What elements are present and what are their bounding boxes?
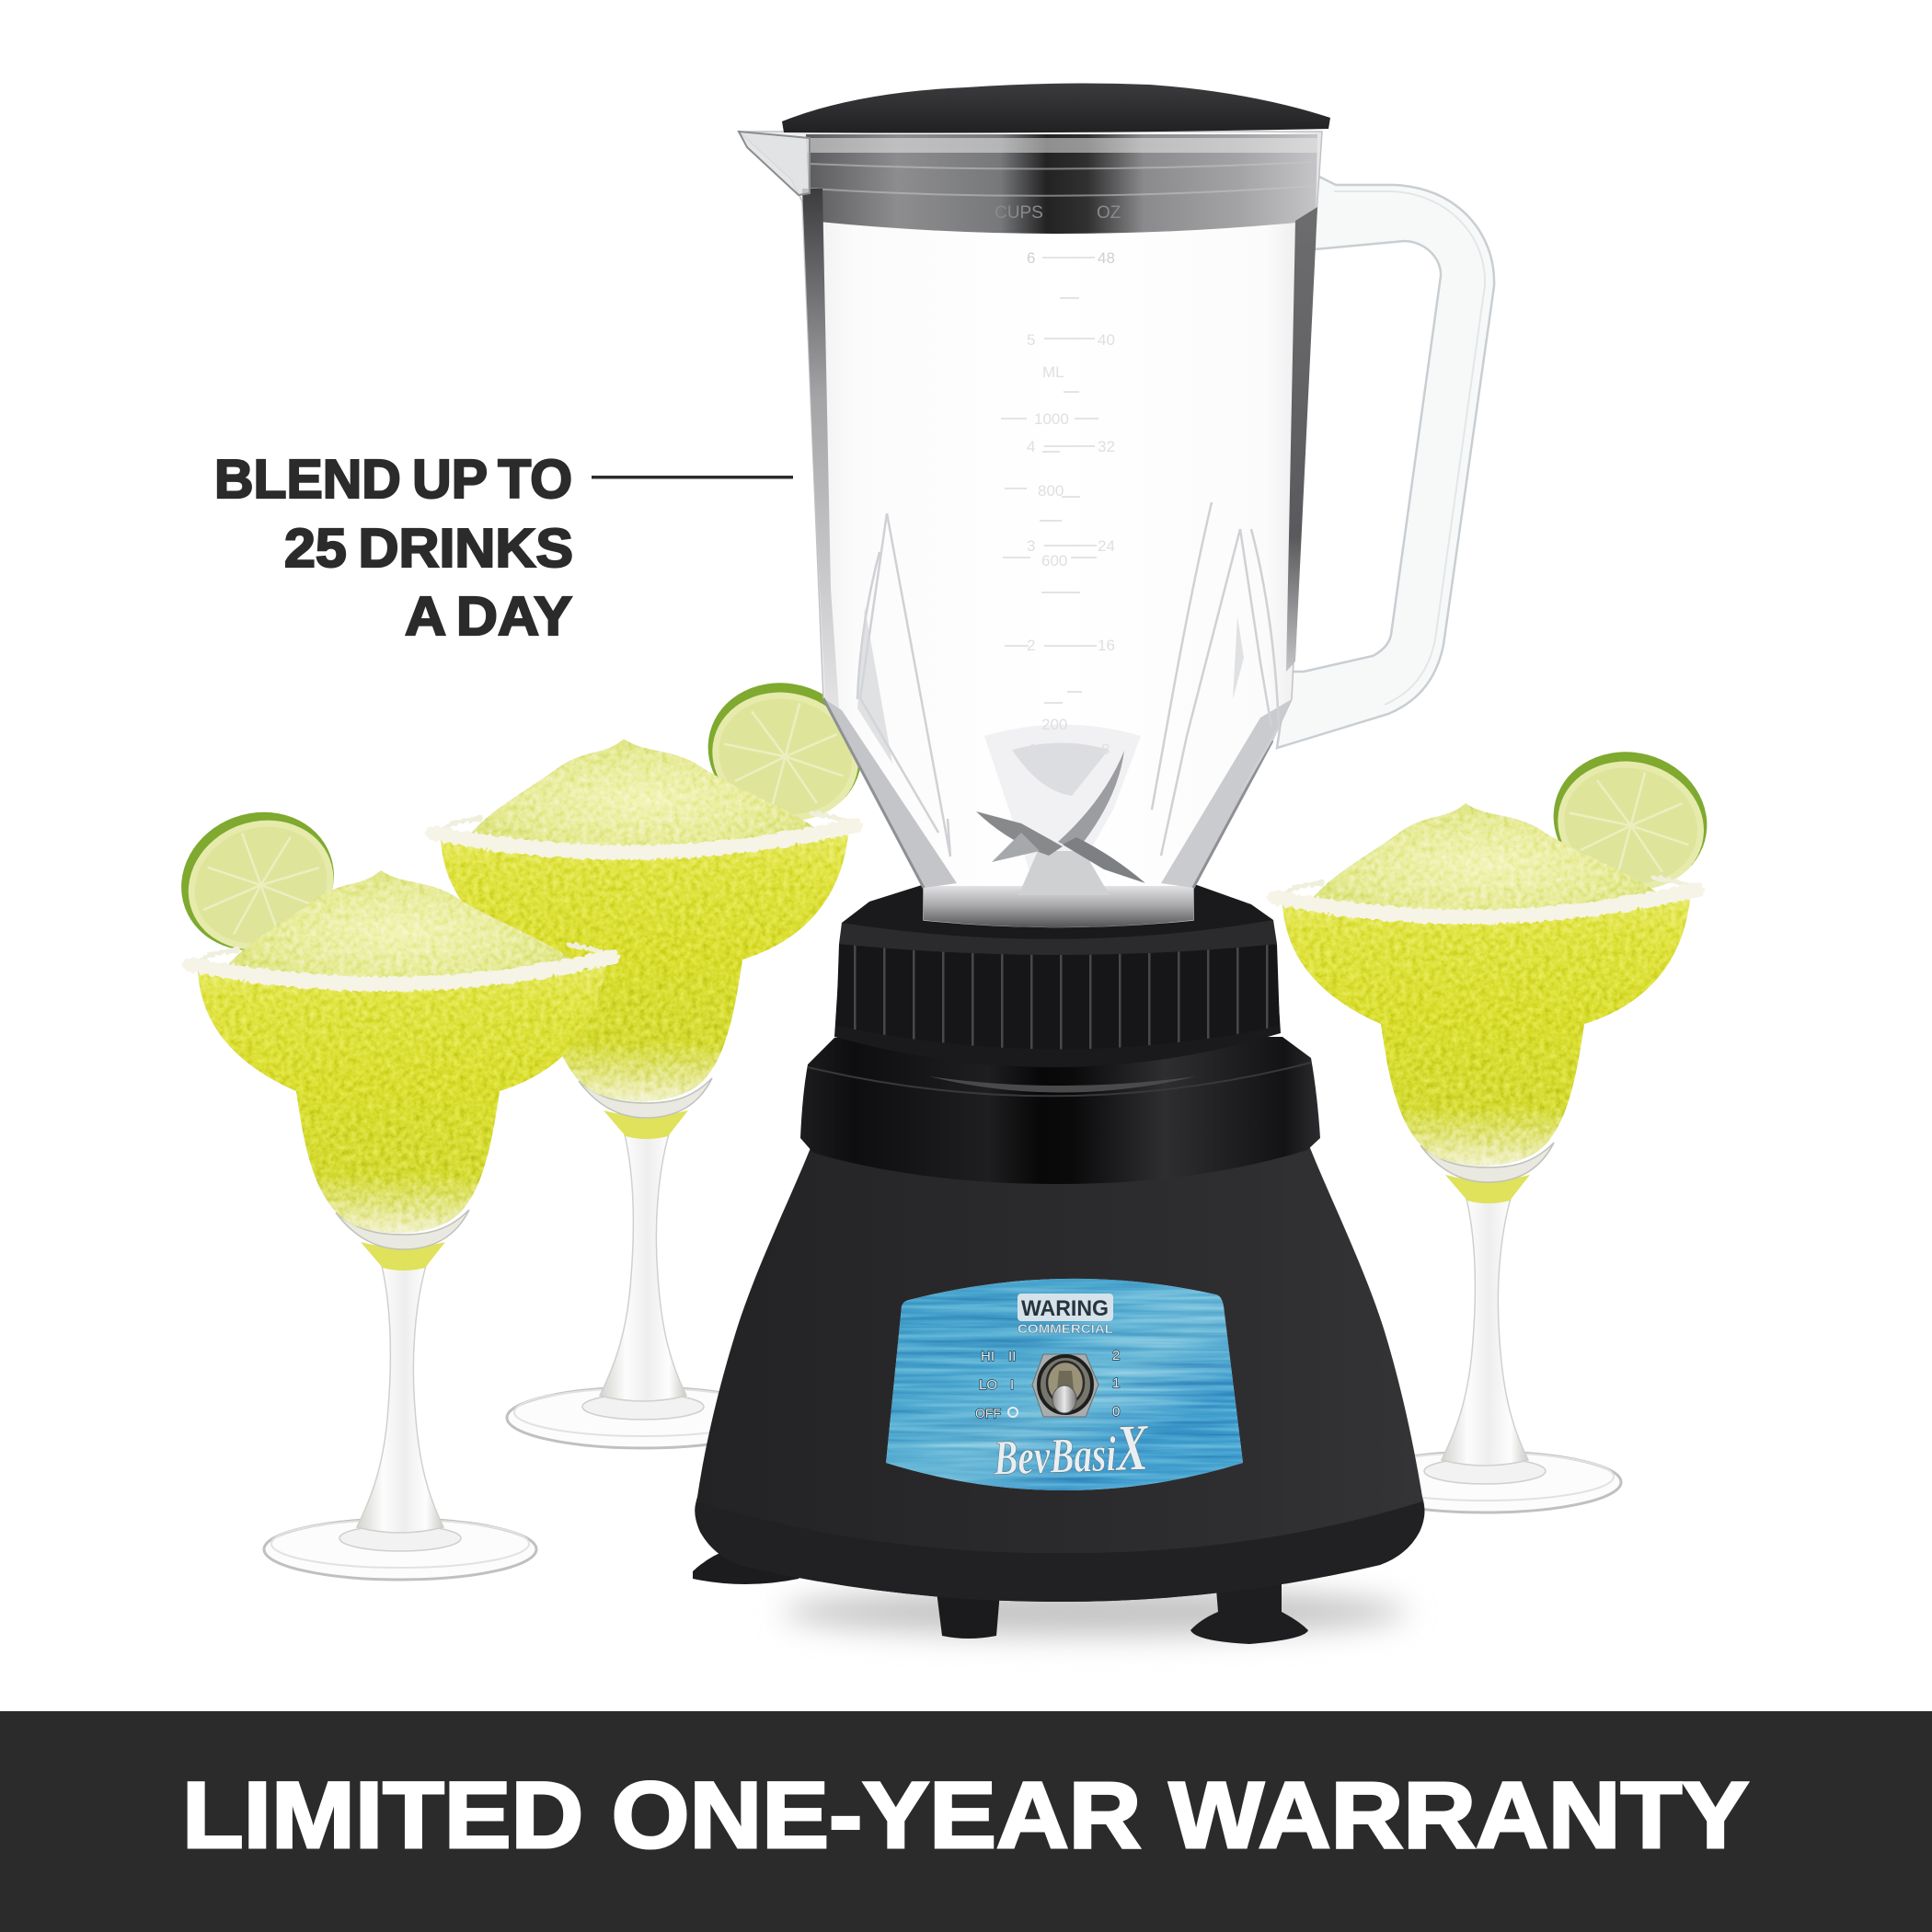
jar measurement marks: 4 bbox=[1027, 438, 1035, 455]
warranty text: LIMITED ONE-YEAR WARRANTY bbox=[182, 1763, 1749, 1868]
jar measurement marks: ML bbox=[1042, 363, 1064, 381]
jar measurement marks bbox=[995, 203, 1121, 758]
jar inner fins bbox=[857, 502, 1279, 857]
jar spout bbox=[739, 132, 810, 195]
shoulder ledge highlight bbox=[929, 1076, 1196, 1093]
lower base band bbox=[695, 1501, 1424, 1602]
logo: Waring Commercial bbox=[1018, 1294, 1113, 1336]
blender jar bbox=[739, 84, 1494, 927]
switch labels: II bbox=[1008, 1349, 1016, 1364]
warranty banner bbox=[0, 1711, 1932, 1932]
margarita glass: back centre bbox=[433, 666, 877, 1448]
margarita glass: right bbox=[1275, 735, 1722, 1512]
jar measurement marks: 1000 bbox=[1034, 410, 1069, 428]
blender ground shadow bbox=[782, 1588, 1408, 1636]
switch labels: HI bbox=[981, 1349, 995, 1364]
callout: drinks per day: A DAY bbox=[405, 586, 572, 647]
jar measurement marks: 40 bbox=[1098, 331, 1115, 349]
jar measurement marks: 24 bbox=[1098, 537, 1115, 555]
switch labels: OFF bbox=[975, 1406, 1001, 1420]
jar measurement marks: 600 bbox=[1041, 552, 1067, 569]
base body bbox=[696, 1141, 1424, 1602]
callout: drinks per day: BLEND UP TO bbox=[214, 449, 572, 510]
dark gasket band bbox=[806, 134, 1317, 234]
callout: drinks per day bbox=[214, 449, 793, 647]
jar measurement marks: 2 bbox=[1027, 637, 1035, 654]
jar right dark edge bbox=[1286, 207, 1317, 672]
logo: Waring Commercial: COMMERCIAL bbox=[1018, 1321, 1113, 1336]
jar left dark edge bbox=[802, 189, 839, 708]
jar body bbox=[739, 132, 1322, 927]
toggle switch bbox=[1032, 1354, 1098, 1417]
jar foot over collar bbox=[924, 886, 1193, 927]
margarita glass: front left bbox=[162, 791, 612, 1580]
jar measurement marks: 16 bbox=[1098, 637, 1115, 654]
jar measurement marks: 5 bbox=[1027, 331, 1035, 349]
switch labels bbox=[975, 1348, 1120, 1420]
jar measurement marks: CUPS bbox=[995, 203, 1043, 223]
collar with ribs bbox=[834, 885, 1281, 1067]
callout leader line bbox=[592, 476, 793, 478]
jar measurement marks: 3 bbox=[1027, 537, 1035, 555]
foot: left bbox=[693, 1550, 799, 1584]
jar measurement marks: OZ bbox=[1097, 203, 1121, 223]
switch labels: 1 bbox=[1112, 1375, 1120, 1391]
switch labels: I bbox=[1010, 1377, 1014, 1393]
jar measurement marks: 1 bbox=[1029, 741, 1037, 758]
foot: right suction cup bbox=[1190, 1578, 1308, 1644]
lid bbox=[782, 84, 1330, 132]
jar measurement marks: 8 bbox=[1101, 741, 1110, 758]
jar measurement marks: 800 bbox=[1038, 482, 1064, 500]
switch labels: LO bbox=[979, 1377, 997, 1393]
jar taper shading bbox=[823, 698, 957, 888]
switch labels: 0 bbox=[1112, 1404, 1120, 1420]
jar measurement marks: 200 bbox=[1041, 716, 1067, 733]
jar measurement marks: 6 bbox=[1027, 249, 1035, 267]
logo: BevBasiX: BevBasiX bbox=[992, 1410, 1151, 1489]
switch labels: 2 bbox=[1112, 1348, 1120, 1363]
callout: drinks per day: 25 DRINKS bbox=[284, 518, 573, 579]
blender base bbox=[693, 885, 1424, 1644]
foot: centre bbox=[937, 1592, 1000, 1639]
shoulder ring bbox=[800, 1037, 1320, 1184]
blade assembly bbox=[976, 751, 1145, 895]
jar measurement marks: 48 bbox=[1098, 249, 1115, 267]
logo: Waring Commercial: WARING bbox=[1021, 1296, 1109, 1321]
jar measurement marks: 32 bbox=[1098, 438, 1115, 455]
control panel plate bbox=[886, 1279, 1243, 1490]
jar handle bbox=[1277, 175, 1494, 748]
